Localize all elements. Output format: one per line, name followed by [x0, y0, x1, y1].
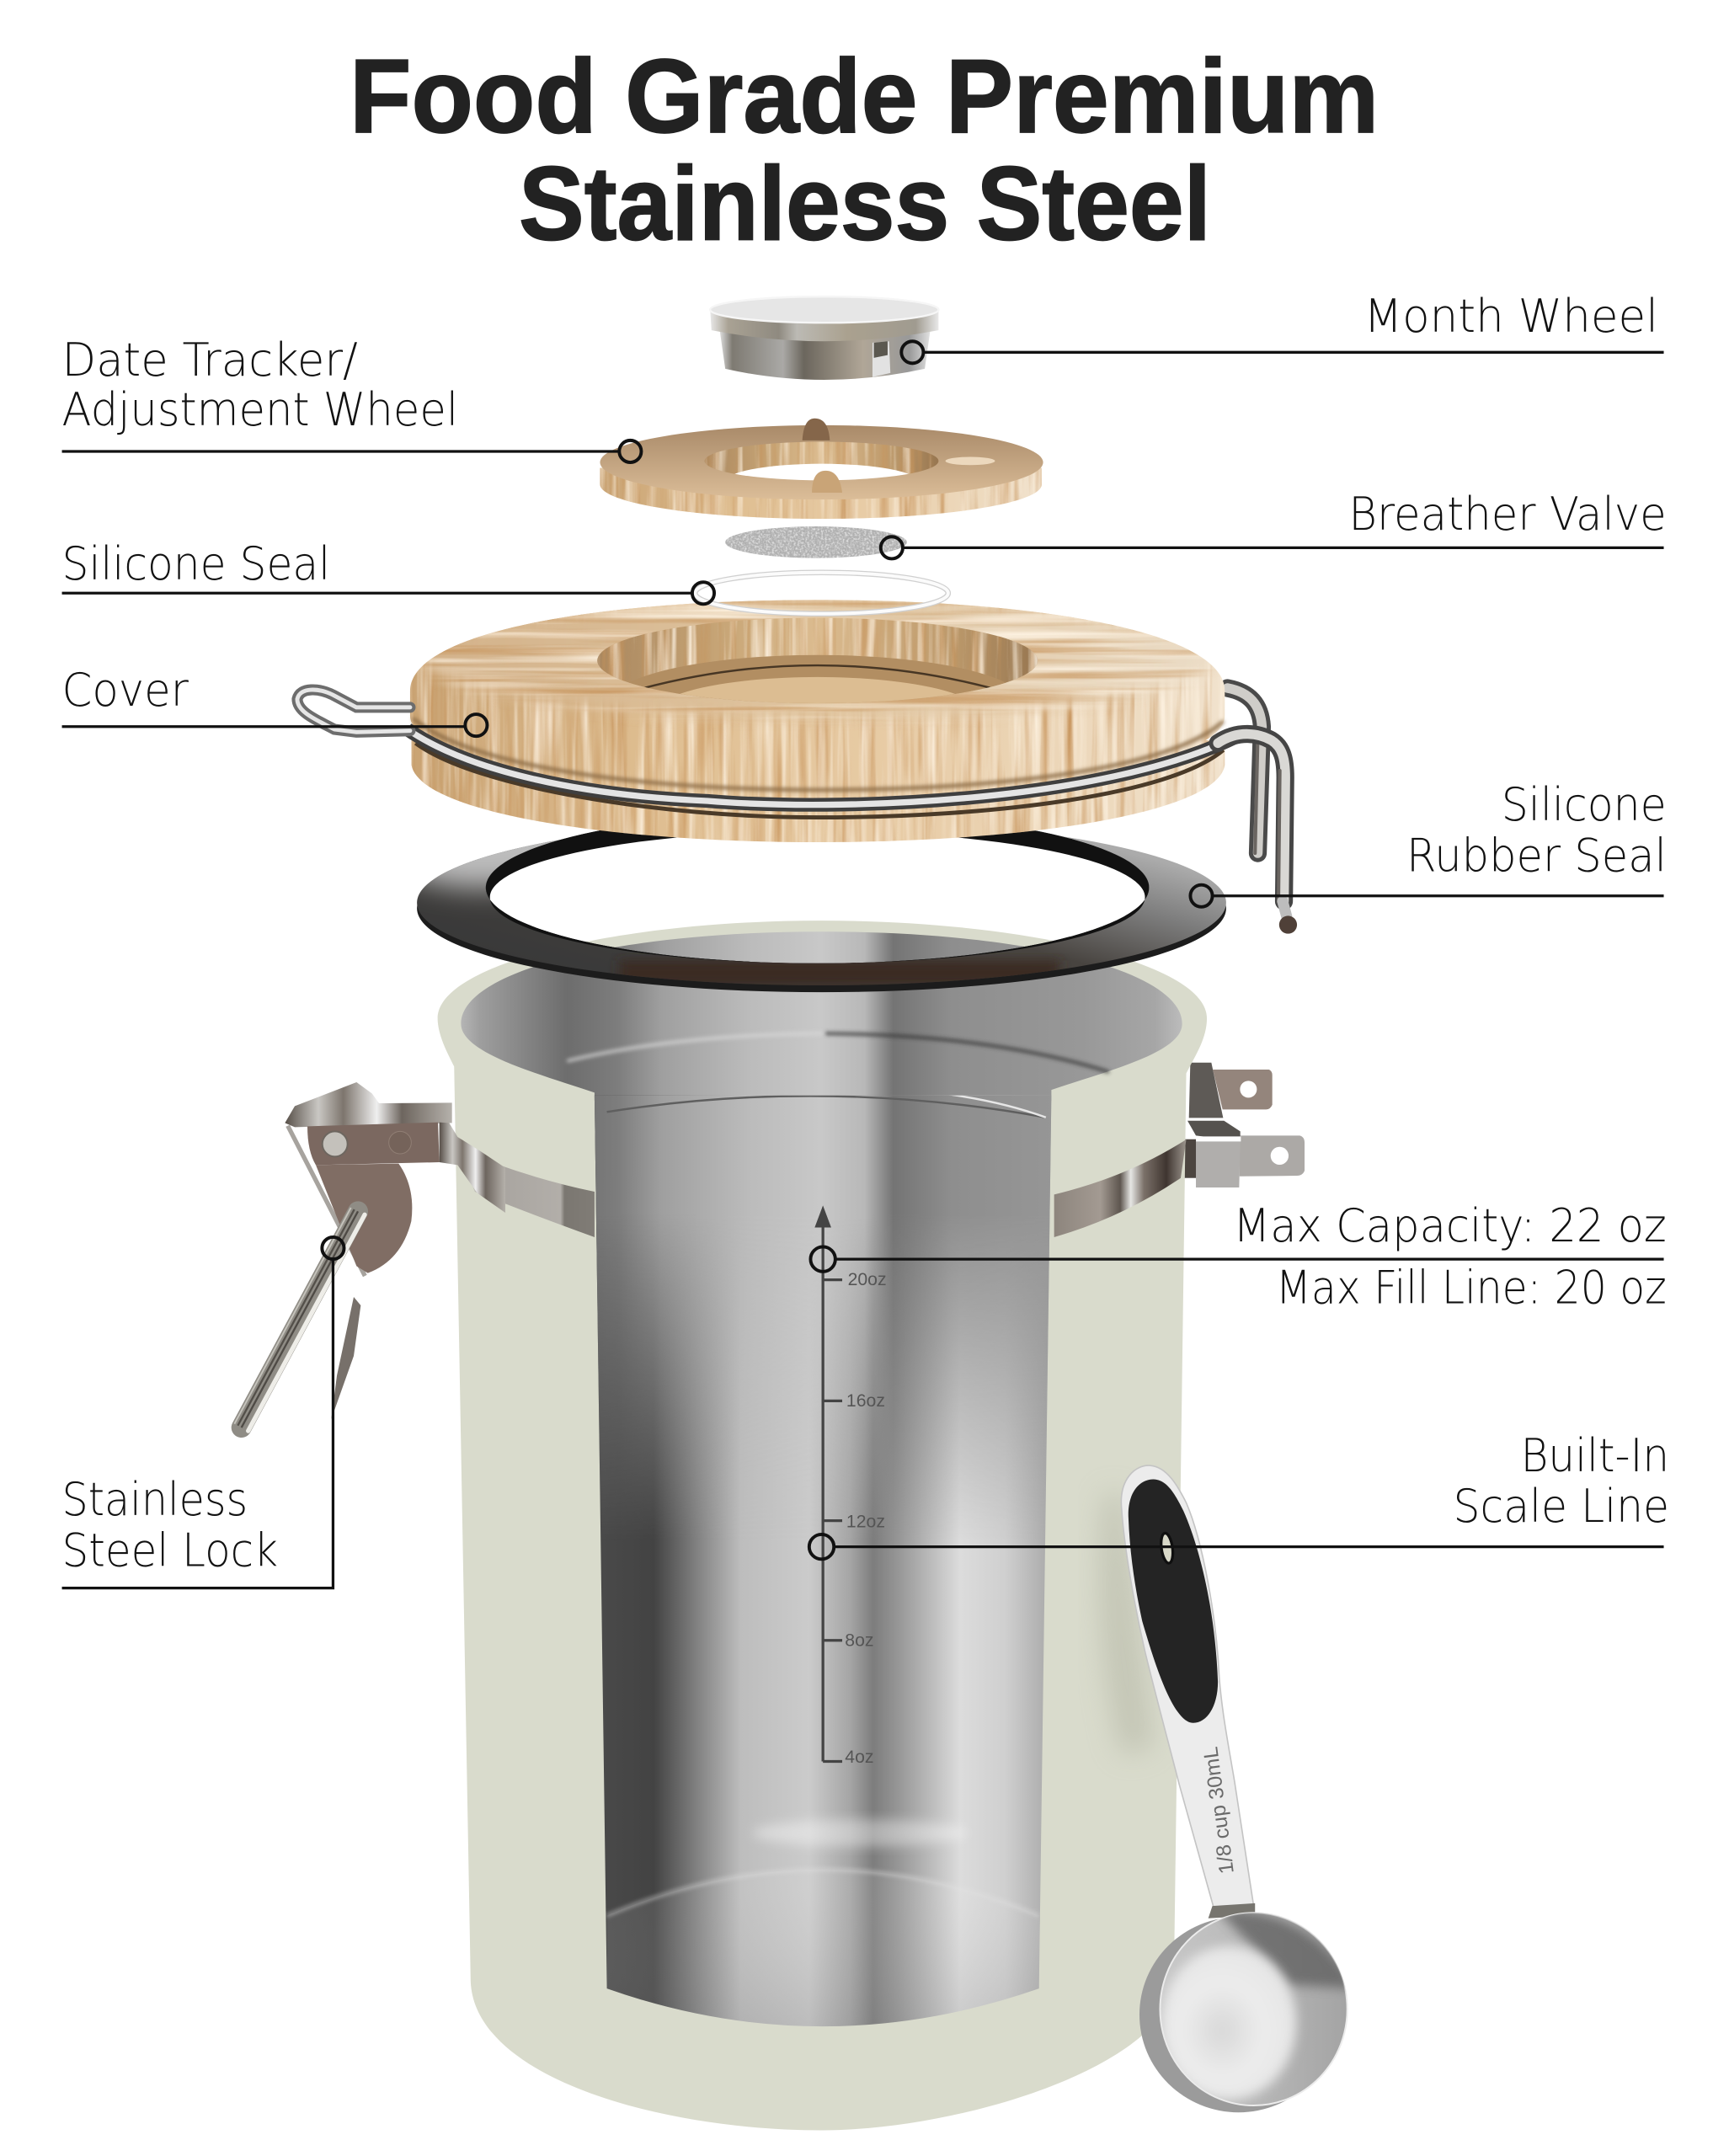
label: Built-In Scale Line: Scale Line [1454, 1480, 1669, 1533]
cover [297, 597, 1297, 934]
label: Date Tracker / Adjustment Wheel: Adjustment Wheel [62, 383, 458, 436]
silicone seal o-ring [695, 573, 948, 614]
label: Max Capacity and Max Fill Line: Max Capacity: 22 oz [1233, 1199, 1667, 1252]
canister body [438, 921, 1207, 2130]
cover top face [424, 597, 1211, 718]
steel interior rim [461, 931, 1182, 1101]
breather valve [725, 526, 907, 558]
cover lower disc [412, 740, 1225, 842]
title: Food Grade Premium [350, 39, 1379, 155]
lid top face [710, 296, 938, 323]
date tracker wheel [600, 419, 1043, 519]
measuring scoop [1100, 1465, 1356, 2112]
cover wire ring [408, 729, 1235, 805]
left strap [458, 1149, 595, 1237]
label: Breather Valve: Breather Valve [1348, 488, 1667, 541]
label: Silicone Rubber Seal: Silicone [1502, 778, 1667, 831]
built-in scale line [814, 1205, 887, 1767]
label: Month Wheel: Month Wheel [1363, 290, 1658, 343]
title: Stainless Steel [519, 146, 1211, 262]
cover center well [597, 618, 1038, 703]
right latch wire [1218, 734, 1297, 934]
label: Built-In Scale Line [809, 1429, 1669, 1559]
scoop cup [1139, 1910, 1356, 2112]
canister assembly [234, 921, 1305, 2130]
metal body [720, 330, 931, 380]
slot [873, 341, 890, 377]
label: Max Capacity and Max Fill Line: Max Fill Line: 20 oz [1276, 1261, 1667, 1314]
label: Max Capacity and Max Fill Line [810, 1199, 1667, 1314]
latch wire back legs [1228, 688, 1262, 853]
label: Date Tracker / Adjustment Wheel [62, 334, 641, 462]
rubber seal inner wall [486, 812, 1149, 963]
built-in scale line: 4oz [845, 1747, 874, 1767]
wheel nubs [803, 419, 830, 440]
label: Silicone Seal [62, 537, 714, 604]
label: Cover [62, 664, 487, 736]
label: Silicone Rubber Seal: Rubber Seal [1406, 829, 1667, 882]
label: Month Wheel [901, 290, 1664, 363]
built-in scale line: 16oz [846, 1390, 885, 1411]
label: Breather Valve [881, 488, 1667, 558]
label: Date Tracker / Adjustment Wheel: Date Tracker/ [62, 334, 358, 387]
silicone rubber seal [417, 830, 1226, 992]
wheel side [600, 468, 1042, 519]
title [350, 39, 1379, 262]
label: Silicone Rubber Seal [1190, 778, 1667, 907]
lid band [710, 308, 938, 341]
steel interior cutaway [567, 1033, 1109, 2051]
rim ledge groove [567, 1033, 824, 1061]
label: Stainless Steel Lock: Stainless [62, 1473, 248, 1526]
label: Built-In Scale Line: Built-In [1521, 1429, 1669, 1482]
wheel top face [600, 425, 1043, 499]
built-in scale line: 12oz [846, 1512, 885, 1532]
cover upper body [410, 600, 1225, 790]
scoop size label: 1/8 cup 30mL [1199, 1745, 1239, 1876]
built-in scale line: 20oz [848, 1269, 887, 1289]
wheel center opening [704, 441, 938, 480]
month wheel [710, 296, 938, 380]
hinge on right of canister [1181, 1063, 1305, 1187]
label: Silicone Seal: Silicone Seal [62, 537, 330, 590]
stainless steel lock [234, 1082, 505, 1431]
label: Stainless Steel Lock [62, 1237, 344, 1588]
label: Cover: Cover [62, 664, 189, 717]
built-in scale line: 8oz [845, 1630, 874, 1650]
cover shadow lines [413, 718, 1224, 818]
label: Stainless Steel Lock: Steel Lock [62, 1524, 278, 1577]
right strap [1054, 1139, 1187, 1237]
left latch wire [297, 690, 410, 732]
